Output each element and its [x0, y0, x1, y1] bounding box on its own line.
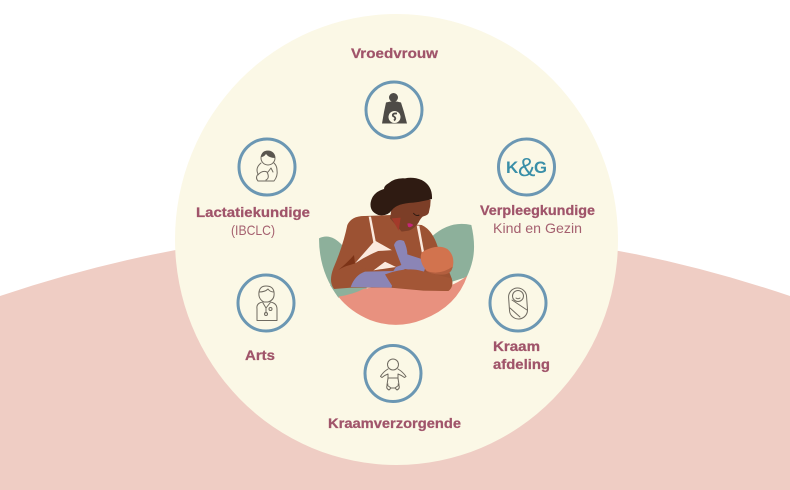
coral blanket	[338, 276, 467, 325]
label: Kraam afdeling	[493, 338, 550, 372]
closed eye	[413, 213, 419, 216]
baby body in lilac	[351, 240, 426, 288]
green background leaves	[319, 224, 474, 297]
label: Lactatiekundige (IBCLC)	[196, 204, 310, 238]
label: Kraam afdeling: Kraam	[493, 338, 540, 354]
baby head	[421, 247, 453, 273]
mother hand on breast	[355, 250, 403, 270]
icon: K&G logo: &	[518, 152, 535, 182]
label: Arts: Arts	[245, 347, 275, 363]
upper arm shadow	[338, 255, 355, 270]
pink background hill	[0, 230, 790, 490]
neck shadow	[392, 218, 401, 231]
neck and face	[390, 195, 431, 232]
illustration: mother breastfeeding baby	[319, 178, 474, 325]
icon: arts	[238, 275, 294, 331]
icon: K&G logo: K	[506, 158, 519, 177]
lips	[407, 223, 413, 227]
hair	[370, 178, 432, 215]
baby head shadow	[426, 267, 453, 275]
cream bra	[355, 217, 393, 263]
label: Verpleegkundige Kind en Gezin	[480, 202, 595, 236]
label: Lactatiekundige (IBCLC): (IBCLC)	[231, 222, 275, 238]
label: Verpleegkundige Kind en Gezin: Verpleegkundige	[480, 202, 595, 218]
icon: kraamafdeling swaddled baby	[490, 275, 546, 331]
icon: K&G logo	[498, 139, 554, 195]
cream central circle	[175, 14, 618, 465]
right bra strap	[417, 226, 424, 253]
icon: K&G logo: G	[534, 158, 547, 177]
label: Vroedvrouw: Vroedvrouw	[351, 45, 438, 61]
icon: vroedvrouw	[366, 82, 422, 138]
label: Verpleegkundige Kind en Gezin: Kind en Gezin	[493, 220, 582, 236]
label: Kraamverzorgende: Kraamverzorgende	[328, 415, 461, 431]
lower bra	[373, 262, 396, 270]
label: Kraam afdeling: afdeling	[493, 356, 550, 372]
mother forearm	[385, 269, 452, 291]
label: Lactatiekundige (IBCLC): Lactatiekundige	[196, 204, 310, 220]
green gaps above blanket	[330, 282, 427, 298]
icon: lactatiekundige	[239, 139, 295, 195]
icon: kraamverzorgende baby	[365, 346, 421, 402]
mother body	[331, 215, 452, 291]
